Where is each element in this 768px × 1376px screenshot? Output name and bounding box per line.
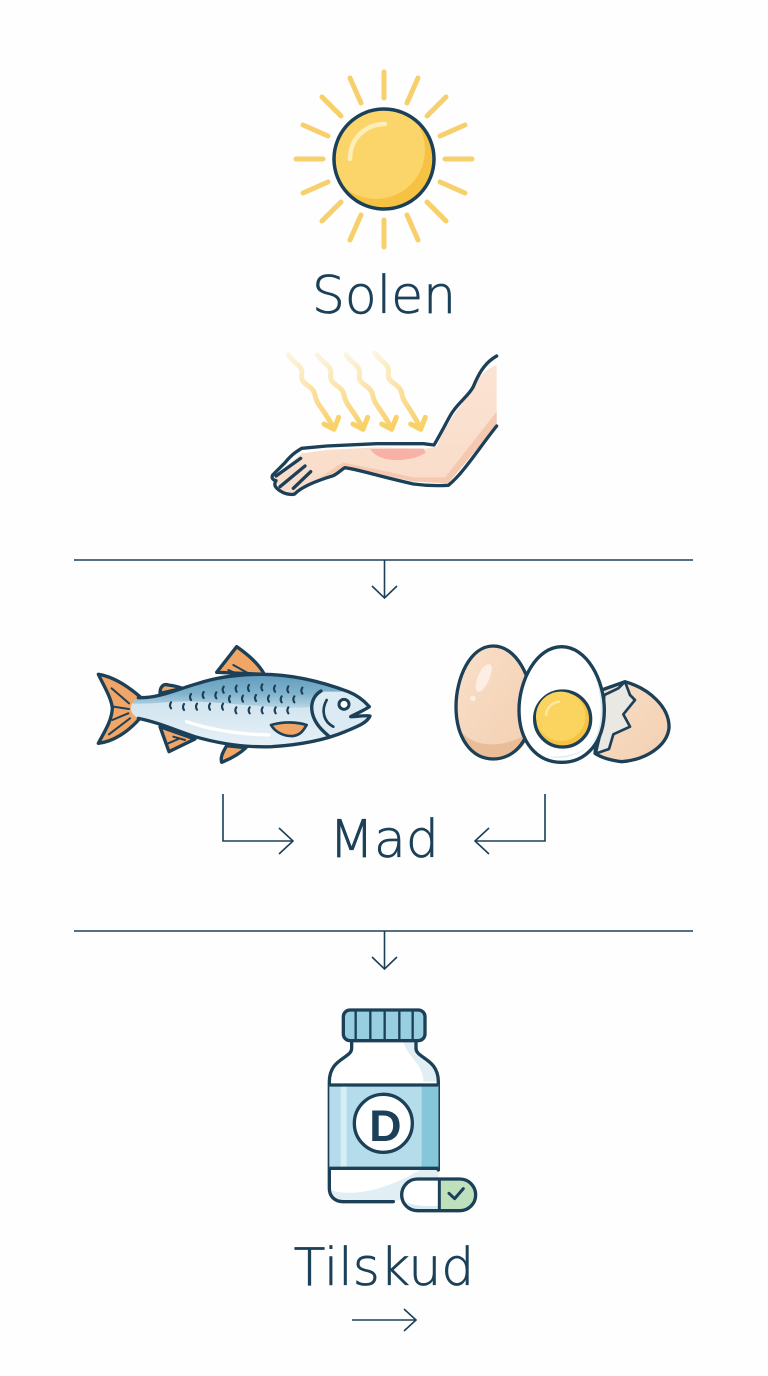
capsule bbox=[402, 1179, 476, 1211]
bottle cap bbox=[343, 1010, 425, 1041]
icon: eggs bbox=[456, 646, 669, 762]
infographic canvas bbox=[74, 70, 693, 1332]
belly highlight bbox=[187, 722, 269, 735]
icon: salmon fish bbox=[98, 647, 372, 762]
sun rays bbox=[296, 72, 472, 247]
scales bbox=[170, 684, 302, 713]
label letter D: D bbox=[369, 1102, 401, 1151]
yolk bbox=[535, 691, 591, 747]
bottle body bbox=[329, 1041, 438, 1202]
divider with arrow bbox=[74, 931, 693, 969]
fish body bbox=[128, 672, 372, 747]
cracked eggshell bbox=[595, 682, 669, 762]
sun disc bbox=[327, 101, 434, 209]
divider with arrow bbox=[74, 560, 693, 598]
head: gill and eye bbox=[312, 691, 349, 736]
connector arrow right to Mad bbox=[475, 794, 545, 854]
whole egg bbox=[456, 646, 532, 759]
connector arrow left to Mad bbox=[223, 794, 293, 854]
fins and tail bbox=[98, 647, 264, 762]
fin rays bbox=[109, 665, 248, 743]
heading: Tilskud: Tilskud bbox=[294, 1238, 474, 1298]
heading: Mad: Mad bbox=[329, 810, 439, 870]
icon: vitamin D bottle bbox=[329, 1010, 476, 1211]
wavy rays bbox=[288, 353, 425, 429]
pectoral fin bbox=[271, 722, 307, 736]
icon: sun rays on arm bbox=[272, 353, 497, 494]
arrow: right bbox=[352, 1309, 416, 1331]
halved egg bbox=[519, 647, 604, 762]
heading: Solen: Solen bbox=[312, 266, 456, 326]
label band bbox=[329, 1085, 438, 1168]
icon: sun bbox=[296, 72, 472, 247]
arm bbox=[272, 356, 497, 494]
